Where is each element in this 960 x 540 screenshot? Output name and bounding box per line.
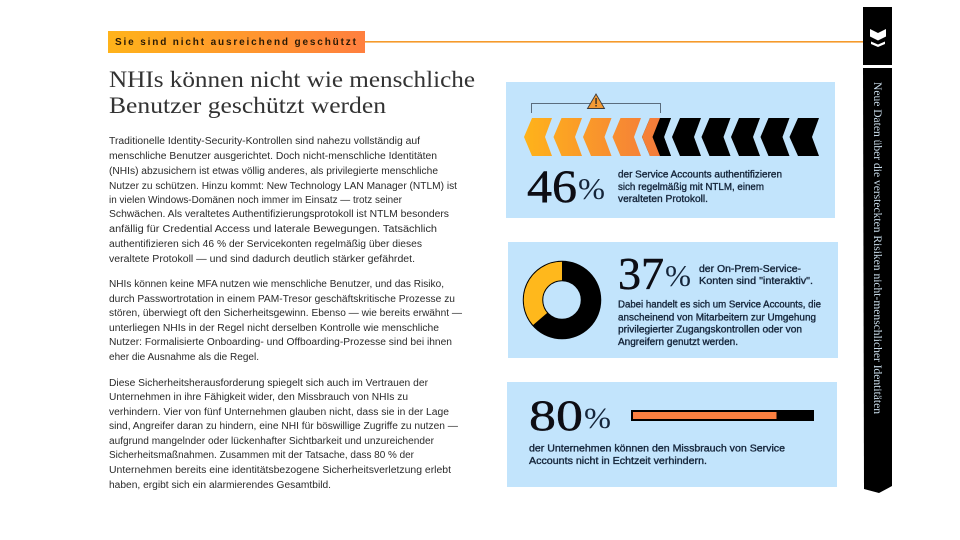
panel: 46 percent NTLM xyxy=(506,82,835,218)
text block: paragraph 1 xyxy=(109,136,457,265)
detail text: anscheinend von Mitarbeitern zur Umgehung xyxy=(618,312,816,324)
text block: paragraph 1: Traditionelle Identity-Security-Kontrollen sind nahezu vollständig auf xyxy=(109,136,420,147)
stat description: der Unternehmen können den Missbrauch von Service xyxy=(529,444,785,454)
text block: paragraph 2: Nutzer: Formalisierte Onboarding- und Offboarding-Prozesse sind bei ihnen xyxy=(109,337,452,348)
progress bar xyxy=(631,410,814,421)
stat: 37%: % xyxy=(665,258,691,293)
detail text: Dabei handelt es sich um Service Accounts, die xyxy=(618,300,821,310)
section header banner: Sie sind nicht ausreichend geschützt xyxy=(115,37,357,48)
stat description: veralteten Protokoll. xyxy=(618,194,708,205)
title: Benutzer geschützt werden xyxy=(109,93,387,118)
stat description: der Service Accounts authentifizieren xyxy=(618,170,782,180)
sidebar: vertical title strip: Neue Daten über die versteckten Risiken nicht-menschlicher Identitäten xyxy=(871,82,885,414)
text block: paragraph 3: aufgrund mangelnder oder lückenhafter Sichtbarkeit und unzureichender xyxy=(109,436,435,447)
donut chart xyxy=(533,271,591,329)
panel: 37 percent interactive xyxy=(508,242,838,358)
text block: paragraph 2: NHIs können keine MFA nutzen wie menschliche Benutzer, und das Risiko, xyxy=(109,279,444,290)
stat: 46%: 46 xyxy=(527,161,577,213)
stat: 80%: % xyxy=(584,402,611,435)
text block: paragraph 1: authentifizieren sich 46 % der Servicekonten regelmäßig über dieses xyxy=(109,239,422,250)
text block: paragraph 1: (NHIs) abzusichern ist etwas völlig anderes, als privilegierte menschliche xyxy=(109,166,438,177)
stat description: Konten sind "interaktiv". xyxy=(699,276,813,287)
stat description xyxy=(529,444,785,467)
stat: 80%: 80 xyxy=(529,393,583,440)
connector line to sidebar xyxy=(365,41,864,43)
stat: 80% xyxy=(529,393,611,440)
stat description: Accounts nicht in Echtzeit verhindern. xyxy=(529,456,707,467)
stat description xyxy=(618,170,782,205)
sidebar: vertical title strip xyxy=(863,68,892,493)
stat: 46% xyxy=(527,161,605,213)
title: NHIs können nicht wie menschliche xyxy=(109,67,475,92)
detail text: Angreifern genutzt werden. xyxy=(618,337,738,348)
text block: paragraph 1: Schwächen. Als veraltetes Authentifizierungsprotokoll ist NTLM besonders xyxy=(109,209,449,220)
panel: 80 percent xyxy=(507,382,837,487)
text block: paragraph 2: eher die Ausnahme als die Regel. xyxy=(109,352,259,363)
detail text xyxy=(618,300,821,348)
text block: paragraph 2: durch Passwortrotation in einem PAM-Tresor geschäftskritische Prozesse zu xyxy=(109,294,455,305)
stat: 37%: 37 xyxy=(618,249,664,299)
text block: paragraph 2 xyxy=(109,279,462,363)
section header banner xyxy=(108,31,365,53)
text block: paragraph 3: verhindern. Vier von fünf Unternehmen glauben nicht, dass sie in der Lage xyxy=(109,407,449,418)
text block: paragraph 1: Nutzer zu schützen. Hinzu kommt: New Technology LAN Manager (NTLM) ist xyxy=(109,181,457,192)
text block: paragraph 3: Diese Sicherheitsherausforderung spiegelt sich auch im Vertrauen der xyxy=(109,378,429,389)
detail text: privilegierter Zugangskontrollen oder von xyxy=(618,324,802,336)
text block: paragraph 3: Unternehmen in ihre Fähigkeit wider, den Missbrauch von NHIs zu xyxy=(109,392,408,403)
title xyxy=(109,67,475,118)
icon: chevrons down xyxy=(870,29,886,47)
stat description xyxy=(699,264,813,287)
text block: paragraph 3: haben, ergibt sich ein alarmierendes Gesamtbild. xyxy=(109,480,331,491)
text block: paragraph 1: menschliche Benutzer ausgerichtet. Doch nicht-menschliche Identitäten xyxy=(109,151,437,162)
stat description: der On-Prem-Service- xyxy=(699,264,801,275)
stat: 46%: % xyxy=(578,171,605,206)
text block: paragraph 3: Sicherheitsmaßnahmen. Zusammen mit der Tatsache, dass 80 % der xyxy=(109,450,415,461)
text block: paragraph 3 xyxy=(109,378,458,491)
chevron progress graphic xyxy=(524,118,819,156)
sidebar: chapter tab xyxy=(863,7,892,65)
icon: warning triangle xyxy=(588,94,604,108)
text block: paragraph 1: anfällig für Credential Access und laterale Bewegungen. Tatsächlich xyxy=(109,224,437,235)
text block: paragraph 2: stören, überwiegt oft den Sicherheitsgewinn. Ebenso — wie bereits erwähnt — xyxy=(109,308,462,319)
stat: 37% xyxy=(618,249,691,299)
stat description: sich regelmäßig mit NTLM, einem xyxy=(618,182,764,193)
bracket xyxy=(532,104,660,113)
text block: paragraph 1: in vielen Windows-Domänen noch immer im Einsatz — trotz seiner xyxy=(109,195,403,206)
text block: paragraph 3: Unternehmen bereits eine identitätsbezogene Sicherheitsverletzung erlebt xyxy=(109,465,451,476)
text block: paragraph 3: sind, Angreifer daran zu hindern, eine NHI für böswillige Zugriffe zu nutzen — xyxy=(109,421,458,432)
text block: paragraph 2: unterliegen NHIs in der Regel nicht derselben Kontrolle wie menschliche xyxy=(109,323,439,334)
text block: paragraph 1: veraltete Protokoll — und sind dadurch deutlich stärker gefährdet. xyxy=(109,254,415,265)
